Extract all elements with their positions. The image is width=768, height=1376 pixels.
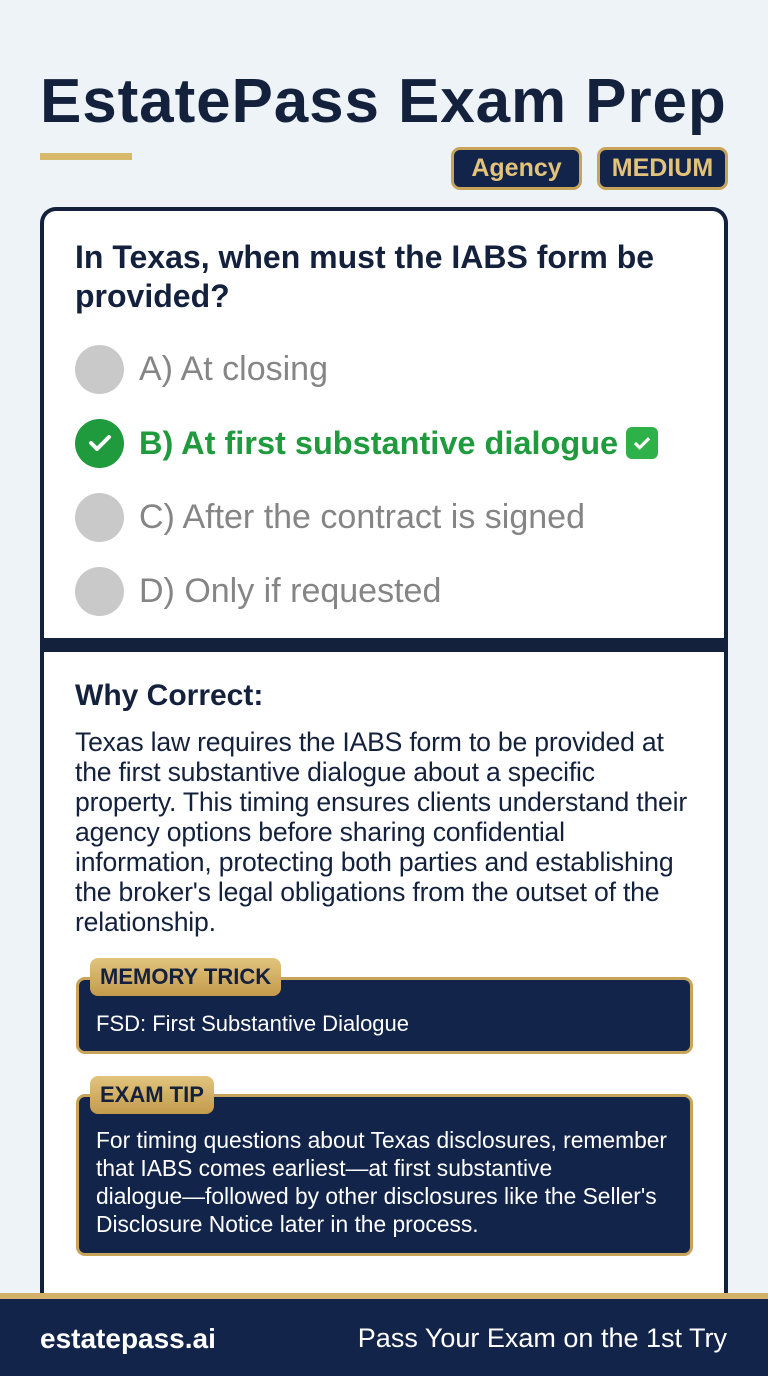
badge: MEDIUM: MEDIUM — [612, 154, 713, 182]
option C — [75, 493, 585, 542]
option B correct: B) At first substantive dialogue — [139, 424, 618, 460]
explanation text: agency options before sharing confidential — [75, 817, 565, 847]
callout: exam tip — [76, 1094, 693, 1256]
label: EXAM TIP: EXAM TIP — [100, 1082, 204, 1107]
badge: MEDIUM — [597, 147, 728, 190]
callout: memory trick — [76, 977, 693, 1054]
gold underline accent — [40, 153, 132, 160]
callout: exam tip: For timing questions about Texas disclosures, remember — [96, 1127, 667, 1153]
explanation text — [75, 727, 687, 937]
heading: Why Correct: Why Correct: — [75, 679, 263, 712]
footer — [0, 1293, 768, 1376]
label: MEMORY TRICK — [90, 958, 281, 996]
callout: exam tip: that IABS comes earliest—at first substantive — [96, 1155, 552, 1181]
option A: A) At closing — [139, 350, 328, 388]
explanation text: information, protecting both parties and establishing — [75, 847, 673, 877]
footer tagline: Pass Your Exam on the 1st Try — [358, 1323, 727, 1353]
callout: exam tip: dialogue—followed by other disclosures like the Seller's — [96, 1183, 657, 1209]
explanation text: property. This timing ensures clients understand their — [75, 787, 687, 817]
explanation text: relationship. — [75, 907, 216, 937]
label: EXAM TIP — [90, 1076, 214, 1114]
badge: Agency: Agency — [471, 154, 562, 182]
footer brand: estatepass.ai — [40, 1323, 216, 1354]
title: EstatePass Exam Prep — [40, 67, 727, 136]
panel: question card — [40, 207, 728, 1307]
explanation text: the broker's legal obligations from the outset of the — [75, 877, 659, 907]
explanation text: the first substantive dialogue about a specific — [75, 757, 595, 787]
option A — [75, 345, 328, 394]
explanation text: Texas law requires the IABS form to be provided at — [75, 727, 664, 757]
option C: C) After the contract is signed — [139, 498, 585, 536]
question text — [75, 239, 654, 314]
option B correct — [75, 419, 658, 468]
callout: memory trick: FSD: First Substantive Dialogue — [96, 1011, 409, 1036]
callout: exam tip: Disclosure Notice later in the process. — [96, 1211, 479, 1237]
question text: In Texas, when must the IABS form be — [75, 239, 654, 275]
badge: Agency — [451, 147, 582, 190]
option D — [75, 567, 441, 616]
option D: D) Only if requested — [139, 572, 441, 610]
label: MEMORY TRICK: MEMORY TRICK — [100, 964, 271, 989]
divider band — [40, 638, 728, 652]
question text: provided? — [75, 278, 230, 314]
